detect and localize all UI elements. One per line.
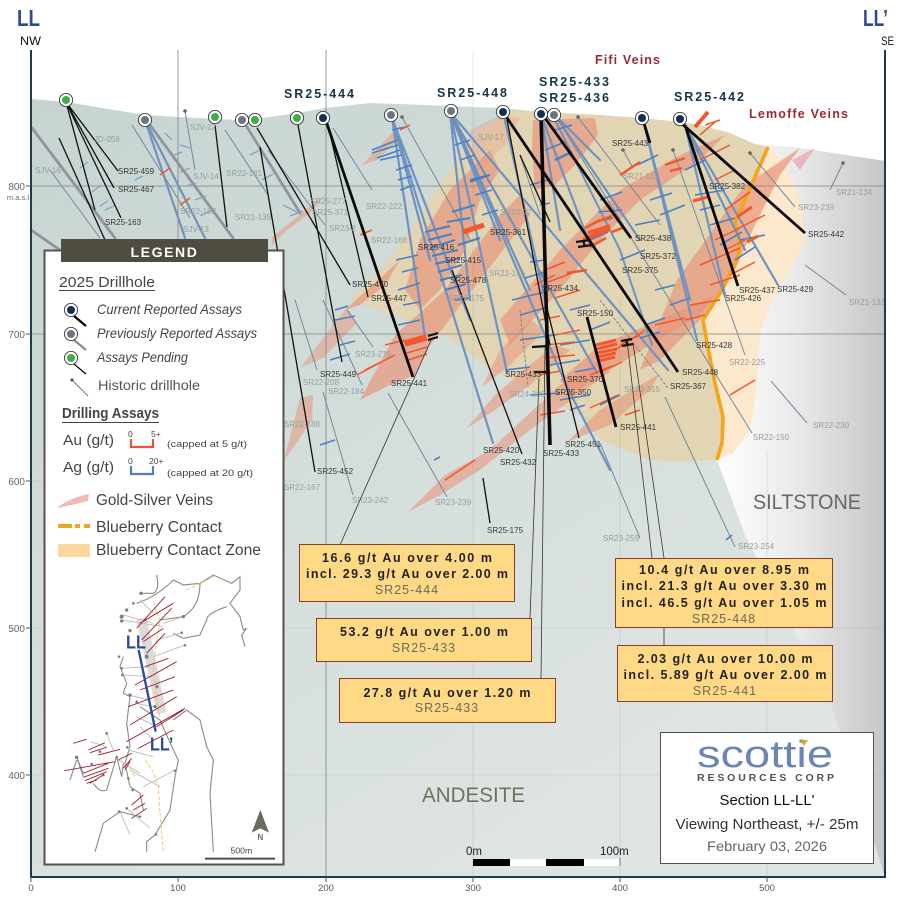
left elevation axis: 700 xyxy=(8,330,25,341)
geology labels xyxy=(422,491,861,807)
callout: SR25-448: 10.4 g/t Au over 8.95 m xyxy=(639,563,809,577)
gray historic drillhole labels: SR21-132 xyxy=(623,172,660,181)
vein set labels: Lemoffe Veins xyxy=(749,107,848,121)
gray historic drillhole labels: SR22-184 xyxy=(328,387,365,396)
callout: SR25-433 second xyxy=(340,678,556,722)
callout: SR25-433 first: SR25-433 xyxy=(392,641,456,655)
geology labels: ANDESITE xyxy=(422,784,525,807)
callout: SR25-444 xyxy=(300,544,514,602)
black drillhole labels: SR25-350 xyxy=(555,388,592,397)
inset scale bar xyxy=(205,846,275,859)
thin historic drillholes xyxy=(50,109,846,547)
black drillhole labels: SR25-420 xyxy=(483,446,520,455)
gray historic drillhole labels: SR25-371 xyxy=(312,208,349,217)
inset section line: LL’ xyxy=(150,734,173,755)
featured drillhole headings: SR25-436 xyxy=(539,91,609,105)
callout: SR25-448 xyxy=(616,558,832,628)
gray historic drillhole labels: SR22-182 xyxy=(180,207,217,216)
section end labels: LL xyxy=(17,5,40,31)
gray historic drillhole labels: SR23-276 xyxy=(355,350,392,359)
scale bar: 100m xyxy=(600,846,629,858)
panel: title block: Section LL-LL' xyxy=(720,793,815,809)
black drillhole labels: SR25-467 xyxy=(118,185,155,194)
left elevation axis: 600 xyxy=(8,477,25,488)
legend header: LEGEND xyxy=(131,244,198,260)
callout: SR25-433 second: SR25-433 xyxy=(415,701,479,715)
black drillhole labels: SR25-150 xyxy=(577,309,614,318)
gray historic drillhole labels xyxy=(35,123,886,551)
blueberry contact line xyxy=(703,147,768,460)
left elevation axis: 500 xyxy=(8,624,25,635)
gray historic drillhole labels: SR23-239 xyxy=(435,498,472,507)
scale bar: 0m xyxy=(466,846,482,858)
gray historic drillhole labels: SR22-150 xyxy=(753,433,790,442)
black drillhole labels: SR25-478 xyxy=(450,276,487,285)
gray historic drillhole labels: JD-058 xyxy=(94,135,120,144)
legend: drilling assays: 0 xyxy=(128,456,133,466)
north arrow xyxy=(252,810,269,842)
inset section line xyxy=(126,631,173,755)
legend: drilling assays: (capped at 20 g/t) xyxy=(167,468,253,479)
legend: drilling assays: 5+ xyxy=(151,429,161,439)
gray historic drillhole labels: SJV-14 xyxy=(193,172,219,181)
section end labels: NW xyxy=(20,36,41,48)
black drillhole labels: SR25-470 xyxy=(352,280,389,289)
bottom distance axis: 100 xyxy=(170,883,186,894)
legend: drillhole section xyxy=(59,274,257,396)
company logo: scottie xyxy=(697,734,833,776)
black drillhole labels: SR25-382 xyxy=(709,182,746,191)
legend: drilling assays: 20+ xyxy=(149,456,163,466)
legend: drilling assays: Ag (g/t) xyxy=(63,459,114,476)
legend: drillhole section: Current Reported Assays xyxy=(97,301,242,317)
callout leader lines xyxy=(340,338,664,678)
drillholes: pending assays (thin black) xyxy=(59,102,579,523)
black drillhole labels: SR25-437 xyxy=(739,286,776,295)
background: siltstone xyxy=(717,144,885,877)
black drillhole labels: SR25-441 xyxy=(620,423,657,432)
bottom distance axis: 300 xyxy=(465,883,481,894)
black drillhole labels: SR25-447 xyxy=(371,294,408,303)
inset location map xyxy=(64,575,275,859)
company logo: RESOURCES CORP xyxy=(697,772,834,784)
panel: title block: Viewing Northeast, +/- 25m xyxy=(676,817,858,833)
black drillhole labels: SR25-415 xyxy=(445,256,482,265)
legend: veins and contact: Blueberry Contact xyxy=(96,519,223,536)
black drillhole labels: SR25-163 xyxy=(105,218,142,227)
black drillhole labels: SR25-438 xyxy=(635,234,672,243)
section end labels: SE xyxy=(881,36,894,48)
gray historic drillhole labels: SR23-239 xyxy=(798,203,835,212)
black drillhole labels: SR25-459 xyxy=(118,167,155,176)
gray historic drillhole labels: SR22-188 xyxy=(284,420,321,429)
black drillhole labels: SR25-428 xyxy=(696,341,733,350)
gray historic drillhole labels: SR23-27 xyxy=(500,208,532,217)
gray historic drillhole labels: SR23-2 xyxy=(329,224,357,233)
gray historic drillhole labels: SR22-208 xyxy=(303,378,340,387)
black drillhole labels: SR25-441 xyxy=(391,379,428,388)
panel: blueberry contact zone xyxy=(350,110,805,462)
black drillhole labels xyxy=(105,139,845,535)
callout: SR25-441: incl. 5.89 g/t Au over 2.00 m xyxy=(624,668,826,682)
featured drillhole headings: SR25-433 xyxy=(539,75,609,89)
callout: SR25-433 first: 53.2 g/t Au over 1.00 m xyxy=(340,625,508,639)
legend: veins and contact xyxy=(58,492,261,559)
callout: SR25-441: SR25-441 xyxy=(693,684,757,698)
callout: SR25-448: incl. 46.5 g/t Au over 1.05 m xyxy=(622,596,826,610)
callout: SR25-444: 16.6 g/t Au over 4.00 m xyxy=(322,551,492,565)
legend: drillhole section: Historic drillhole xyxy=(98,377,200,393)
legend: drilling assays: Au (g/t) xyxy=(63,432,114,449)
bottom distance axis: 0 xyxy=(28,883,34,894)
black drillhole labels: SR25-372 xyxy=(640,252,677,261)
callout: SR25-433 first xyxy=(316,618,532,662)
gray historic drillhole labels: SR23-355 xyxy=(624,385,661,394)
black drillhole labels: SR25-175 xyxy=(487,526,524,535)
inset section line: LL xyxy=(126,631,146,652)
gray historic drillhole labels: SR22-230 xyxy=(813,421,850,430)
black drillhole labels: SR25-426 xyxy=(725,294,762,303)
gray historic drillhole labels: SR21-133 xyxy=(849,298,886,307)
black drillhole labels: SR25-433 xyxy=(505,370,542,379)
section end labels xyxy=(17,5,894,48)
legend: drilling assays: Drilling Assays xyxy=(62,405,159,422)
gold assay ticks xyxy=(160,112,765,480)
featured drillhole headings xyxy=(284,75,744,105)
callout: SR25-448: SR25-448 xyxy=(692,612,756,626)
black drillhole labels: SR25-443 xyxy=(612,139,649,148)
legend: drillhole section: 2025 Drillhole xyxy=(59,274,155,291)
company logo xyxy=(697,734,834,784)
scale bar xyxy=(466,846,629,866)
north arrow: N xyxy=(257,833,263,842)
legend: drilling assays: (capped at 5 g/t) xyxy=(167,439,247,450)
black drillhole labels: SR25-370 xyxy=(567,375,604,384)
callout: SR25-444: SR25-444 xyxy=(375,583,439,597)
gray historic drillhole labels: SJV-12 xyxy=(190,123,216,132)
black drillhole labels: SR25-429 xyxy=(777,285,814,294)
gray historic drillhole labels: SR22-175 xyxy=(448,294,485,303)
gray historic drillhole labels: SR22-168 xyxy=(371,236,408,245)
panel: legend xyxy=(44,239,284,864)
black drillhole labels: SR25-442 xyxy=(808,230,845,239)
black drillhole labels: SR25-367 xyxy=(670,382,707,391)
black drillhole labels: SR25-416 xyxy=(418,243,455,252)
featured drillhole headings: SR25-442 xyxy=(674,90,744,104)
callout: SR25-433 second: 27.8 g/t Au over 1.20 m xyxy=(364,686,530,700)
black drillhole labels: SR25-433 xyxy=(543,449,580,458)
intercept markers xyxy=(428,240,633,372)
gray historic drillhole labels: SR21-134 xyxy=(836,188,873,197)
gray historic drillhole labels: SR22-225 xyxy=(729,358,766,367)
black drillhole labels: SR25-432 xyxy=(500,458,537,467)
black drillhole labels: SR25-451 xyxy=(565,440,602,449)
legend: drilling assays xyxy=(62,405,253,479)
legend: veins and contact: Gold-Silver Veins xyxy=(96,492,213,509)
gray historic drillhole labels: SR24-388 xyxy=(509,390,546,399)
panel: title block xyxy=(660,732,874,864)
gray historic drillhole labels: SR22-156 xyxy=(489,269,526,278)
gray historic drillhole labels: SJV-16 xyxy=(35,166,61,175)
gray historic drillhole labels: SR22-222 xyxy=(366,202,403,211)
callout: SR25-441 xyxy=(618,646,832,702)
legend header xyxy=(61,239,268,262)
gray historic drillhole labels: SR23-259 xyxy=(603,534,640,543)
featured drillhole headings: SR25-444 xyxy=(284,87,354,101)
callout: SR25-441: 2.03 g/t Au over 10.00 m xyxy=(638,652,812,666)
black drillhole labels: SR25-448 xyxy=(682,368,719,377)
black drillhole labels: SR25-452 xyxy=(317,467,354,476)
bottom distance axis: 400 xyxy=(612,883,628,894)
drillholes: current reported assays (thick black) xyxy=(325,112,805,445)
legend: drillhole section: Previously Reported Assays xyxy=(97,325,257,341)
previously reported drillholes xyxy=(31,112,778,470)
bottom distance axis: 500 xyxy=(759,883,775,894)
legend: veins and contact: Blueberry Contact Zone xyxy=(96,542,261,559)
black drillhole labels: SR25-375 xyxy=(622,266,659,275)
bottom distance axis xyxy=(28,877,775,894)
section end labels: LL’ xyxy=(863,5,888,31)
vein set labels: Fifi Veins xyxy=(595,53,660,67)
inset scale bar: 500m xyxy=(231,846,252,856)
drill collars xyxy=(59,93,687,127)
legend: drilling assays: 0 xyxy=(128,429,133,439)
left elevation axis: 400 xyxy=(8,771,25,782)
gray historic drillhole labels: SR22-167 xyxy=(284,483,321,492)
black drillhole labels: SR25-361 xyxy=(490,228,527,237)
gray historic drillhole labels: SJV-17 xyxy=(478,133,504,142)
gray historic drillhole labels: SR23-242 xyxy=(352,496,389,505)
gray historic drillhole labels: SJV-13 xyxy=(183,225,209,234)
bottom distance axis: 200 xyxy=(318,883,334,894)
black drillhole labels: SR25-449 xyxy=(320,370,357,379)
gray historic drillhole labels: SR25-277 xyxy=(310,197,347,206)
left elevation axis: 800 xyxy=(8,182,25,193)
black drillhole labels: SR25-434 xyxy=(542,284,579,293)
left elevation axis xyxy=(7,182,31,782)
left elevation axis: m.a.s.l xyxy=(7,193,29,202)
silver assay ticks xyxy=(80,125,765,540)
callout: SR25-444: incl. 29.3 g/t Au over 2.00 m xyxy=(306,567,508,581)
gray historic drillhole labels: SR23-254 xyxy=(738,542,775,551)
callout: SR25-448: incl. 21.3 g/t Au over 3.30 m xyxy=(622,579,826,593)
vein set labels xyxy=(595,53,848,121)
panel: title block: February 03, 2026 xyxy=(707,838,827,854)
featured drillhole headings: SR25-448 xyxy=(437,86,507,100)
gold-silver veins xyxy=(272,115,815,512)
legend: drillhole section: Assays Pending xyxy=(96,349,188,365)
gray historic drillhole labels: SR21-139 xyxy=(235,213,272,222)
geology labels: SILTSTONE xyxy=(753,491,861,514)
gray historic drillhole labels: SR22-181 xyxy=(226,169,263,178)
